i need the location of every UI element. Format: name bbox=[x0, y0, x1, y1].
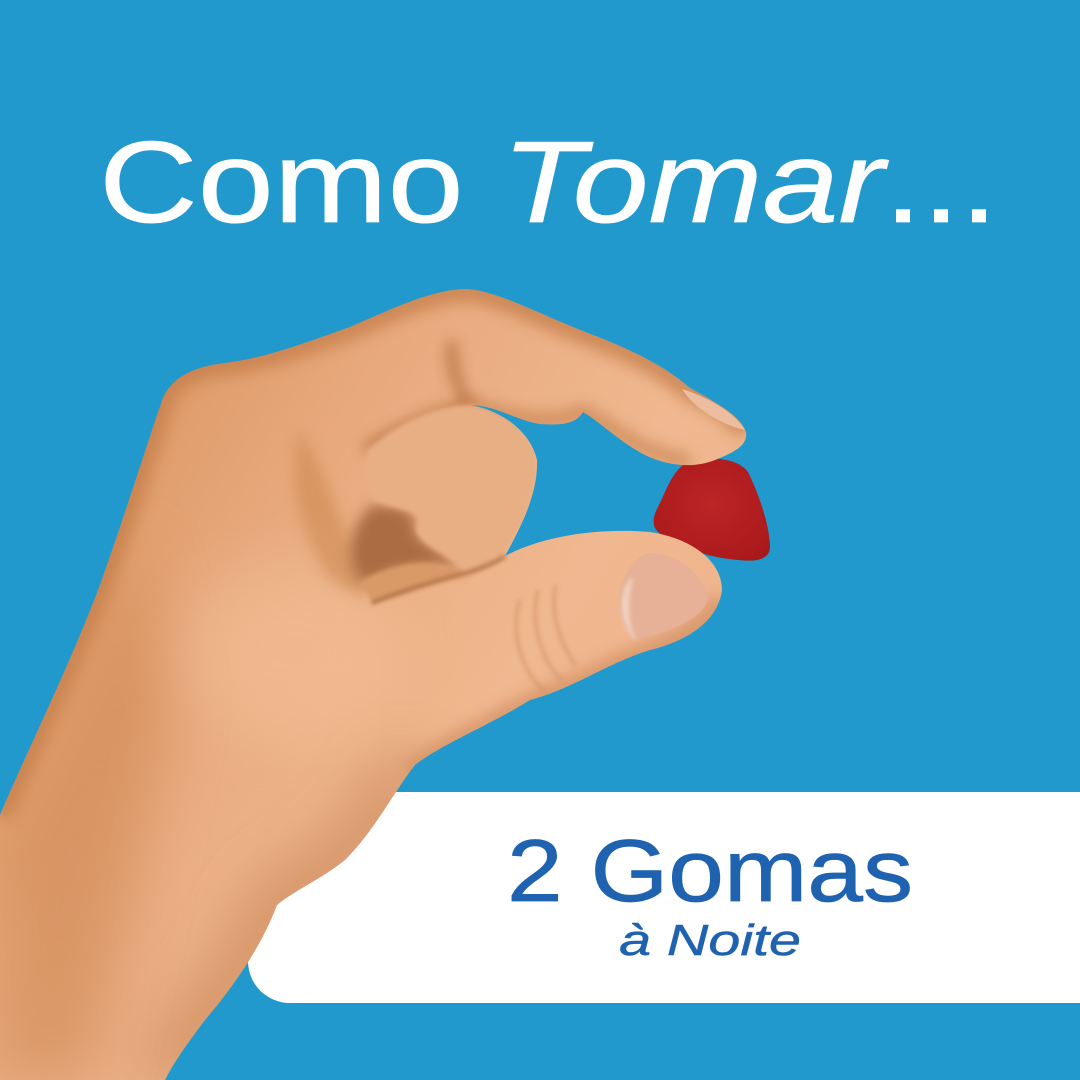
icon: gummy bbox=[654, 459, 770, 561]
index finger crease bbox=[368, 345, 470, 448]
dosage time: à Noite bbox=[619, 916, 801, 965]
curled finger bbox=[365, 405, 537, 572]
thumb knuckle wrinkles bbox=[516, 585, 575, 692]
curled finger shadow bbox=[350, 505, 465, 585]
thumb crease bbox=[372, 556, 505, 603]
index fingernail bbox=[682, 389, 745, 430]
illustration: hand holding gummy bbox=[0, 280, 760, 1080]
thumb nail bbox=[619, 553, 708, 639]
thumb nail lunula bbox=[623, 578, 635, 639]
thumb underside shading bbox=[410, 600, 722, 775]
wrist lower-edge shading bbox=[165, 765, 415, 1080]
palm highlight bbox=[184, 569, 375, 722]
hand silhouette bbox=[0, 280, 760, 1080]
index finger underside shading bbox=[470, 405, 690, 462]
palm fold shading bbox=[294, 430, 368, 600]
title: Como Tomar ... bbox=[99, 117, 998, 247]
lower curled segment bbox=[360, 563, 465, 603]
card: dosage bbox=[248, 792, 1080, 1003]
rim shading bbox=[0, 289, 746, 815]
forearm left shading bbox=[0, 530, 170, 1080]
dosage amount: 2 Gomas bbox=[507, 821, 913, 920]
